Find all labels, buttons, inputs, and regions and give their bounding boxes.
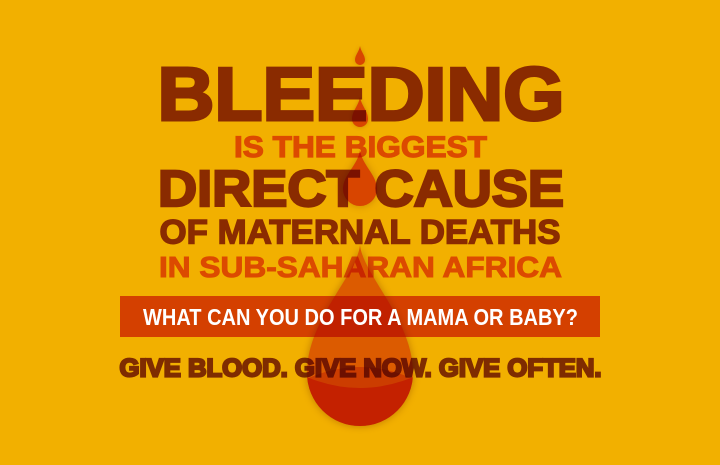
icon: second blood drop xyxy=(352,97,368,127)
call to action: give blood: GIVE BLOOD. GIVE NOW. GIVE OFTEN. xyxy=(120,354,602,382)
heading: direct cause: DIRECT CAUSE xyxy=(158,160,564,217)
subheading: is the biggest: IS THE BIGGEST xyxy=(234,131,487,164)
banner text: WHAT CAN YOU DO FOR A MAMA OR BABY? xyxy=(143,304,578,330)
drop band: darker lens xyxy=(308,367,412,426)
banner background xyxy=(120,296,600,337)
subheading: in sub-saharan africa: IN SUB-SAHARAN AFRICA xyxy=(159,252,562,284)
heading: of maternal deaths: OF MATERNAL DEATHS xyxy=(160,214,560,252)
icon: third blood drop xyxy=(343,150,377,206)
infographic canvas xyxy=(119,46,601,430)
drop base: deepest red xyxy=(307,377,413,426)
icon: small blood drop xyxy=(355,46,365,65)
icon: large blood drop xyxy=(307,245,413,426)
heading: bleeding: BLEEDING xyxy=(158,52,564,136)
